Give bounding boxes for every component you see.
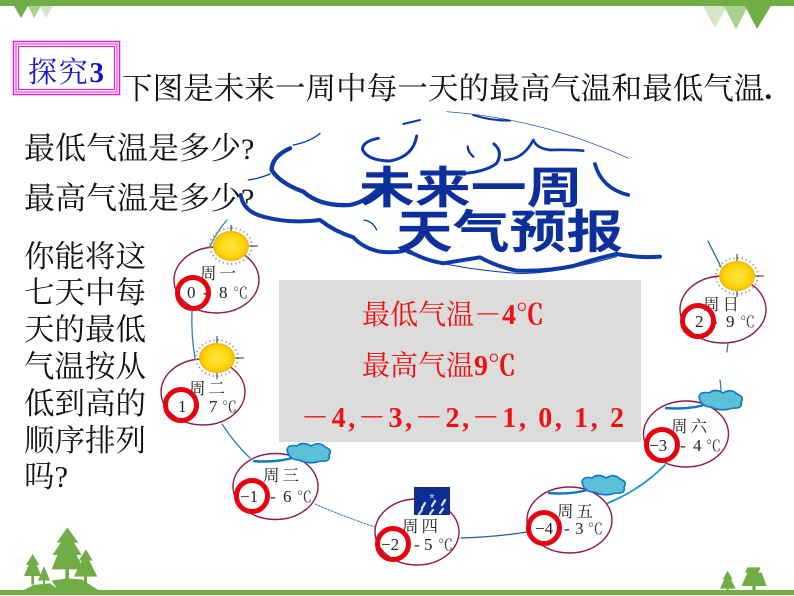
answer: ordered list: －4,－3,－2,－1, 0, 1, 2: [301, 403, 624, 434]
day: Wednesday: 周三: [263, 466, 302, 485]
answer: lowest temperature: 最低气温－4℃: [362, 293, 544, 333]
question: ordering paragraph: 七天中每: [24, 276, 146, 310]
badge: 探究3: 探究3: [28, 56, 104, 89]
day: Sunday: 周日: [703, 295, 742, 314]
day: Tuesday: ℃: [222, 396, 237, 417]
day: Friday: [527, 476, 625, 553]
bottom green bar: [0, 590, 794, 595]
weather forecast cloud title: 未来一周: [359, 163, 582, 213]
weather forecast cloud title: 天气预报: [396, 206, 623, 258]
day: Wednesday: 6: [283, 487, 292, 506]
day: Monday: ℃: [233, 282, 248, 303]
day: Saturday: [644, 390, 742, 467]
question: ordering paragraph: [24, 240, 146, 494]
connecting ring lines: [192, 220, 728, 538]
day: Wednesday: [233, 444, 330, 520]
day: Thursday: [375, 487, 459, 565]
day: Sunday: 9: [726, 312, 734, 331]
day: Tuesday: 1: [178, 397, 186, 416]
weather forecast cloud title: [241, 112, 660, 273]
day: Friday: −4: [535, 519, 554, 538]
left pennant triangles: [14, 6, 53, 18]
day: Saturday: 周六: [671, 417, 710, 436]
question: ordering paragraph: 低到高的: [24, 387, 146, 421]
icon: sun: [196, 336, 244, 379]
day: Wednesday: −1: [240, 487, 258, 506]
badge: 探究3: [14, 42, 120, 94]
day: Sunday: [680, 254, 766, 343]
icon: sun: [716, 254, 764, 297]
day: Tuesday: -: [194, 397, 200, 416]
day: Saturday: 4: [693, 436, 702, 455]
day: Monday: 周一: [200, 264, 239, 283]
icon: snow and rain: *: [429, 490, 435, 506]
icon: cloud: [665, 390, 742, 410]
day: Friday: ℃: [588, 518, 603, 539]
question: ordering paragraph: 顺序排列: [24, 424, 146, 458]
day: Friday: -: [564, 519, 570, 538]
icon: trees bottom left: [24, 527, 98, 590]
icon: trees bottom right: [720, 567, 767, 591]
answer panel: [279, 280, 641, 442]
day: Monday: 0: [187, 283, 196, 302]
question: ordering paragraph: 天的最低: [24, 313, 146, 347]
icon: sun: [210, 225, 258, 264]
right pennant triangles: [703, 6, 771, 29]
day: Tuesday: 周二: [189, 379, 228, 398]
day: Saturday: ℃: [706, 435, 721, 456]
day: Sunday: -: [712, 312, 718, 331]
day: Thursday: ℃: [438, 534, 453, 555]
icon: cloud: [253, 444, 330, 463]
day: Sunday: ℃: [740, 311, 755, 332]
heading sentence: 下图是未来一周中每一天的最高气温和最低气温.: [122, 72, 772, 106]
day: Thursday: −2: [381, 535, 399, 554]
day: Thursday: 5: [424, 535, 432, 554]
day: Tuesday: 7: [209, 397, 218, 416]
icon: cloud: [548, 476, 625, 495]
day: Friday: 3: [575, 519, 584, 538]
day: Friday: 周五: [557, 502, 596, 521]
day: Tuesday: [161, 336, 245, 425]
question: ordering paragraph: 你能将这: [24, 240, 146, 274]
day: Thursday: -: [414, 535, 420, 554]
question: ordering paragraph: 吗?: [24, 460, 68, 494]
day: Saturday: -: [680, 436, 686, 455]
day: Monday: [174, 225, 259, 313]
day: Wednesday: ℃: [297, 486, 312, 507]
day: Thursday: 周四: [402, 517, 441, 536]
day: Monday: -: [203, 283, 209, 302]
answer: highest temperature: 最高气温9℃: [362, 344, 516, 384]
day: Sunday: 2: [695, 312, 704, 331]
question: highest temperature: 最高气温是多少?: [24, 181, 254, 216]
day: Monday: 8: [219, 283, 228, 302]
day: Wednesday: -: [270, 487, 276, 506]
top green bar: [0, 0, 794, 6]
question: ordering paragraph: 气温按从: [24, 350, 146, 384]
day: Saturday: −3: [649, 436, 667, 455]
question: lowest temperature: 最低气温是多少?: [24, 131, 254, 166]
